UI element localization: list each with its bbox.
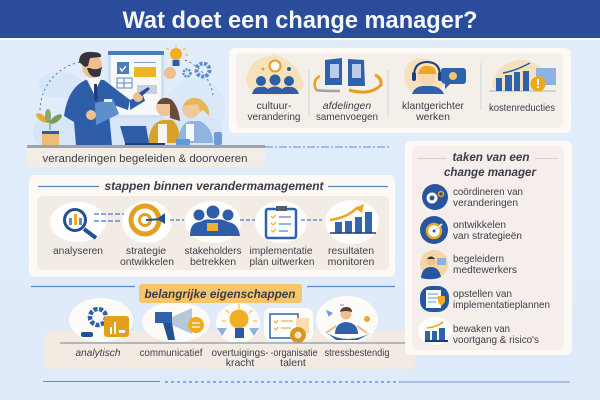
step 1: analyseren: analyseren [53, 245, 103, 257]
label: cultuurverandering: verandering [248, 111, 301, 123]
icon: plant [35, 109, 63, 146]
caption: veranderingen begeleiden [27, 145, 265, 167]
label: afdelingen samenvoegen [316, 100, 378, 123]
heading [444, 152, 537, 179]
heading: belangrijke eigenschappen: belangrijke eigenschappen [144, 287, 296, 301]
step 2: strategie ontwikkelen [120, 201, 174, 268]
heading: stappen: stappen binnen verandermamagement [104, 181, 325, 193]
icon: light bulb [164, 45, 188, 79]
title: Wat doet een change manager? [122, 7, 478, 34]
task: bewaken: bewaken van [453, 323, 510, 335]
manager figure [64, 52, 150, 145]
label: klantgerichter werken: klantgerichter [402, 100, 464, 112]
step 3: stakeholders betrekken: betrekken [190, 256, 236, 268]
task: bewaken: voortgang & risico's [453, 334, 539, 346]
trait: communicatief [140, 302, 210, 359]
hero illustration [33, 45, 225, 146]
task: coördineren: coördineren van [453, 186, 523, 198]
task: begeleiden: medtewerkers [453, 264, 517, 276]
task: opstellen: opstellen van [453, 288, 512, 300]
title [0, 0, 600, 40]
trait: analytisch: analytisch [76, 347, 121, 359]
caption: veranderingen begeleiden: veranderingen begeleiden & doorvoeren [42, 153, 247, 165]
label: kostenreducties: kostenreducties [489, 102, 555, 114]
trait: organisatietalent: -organisatie [270, 347, 318, 359]
trait: communicatief: communicatief [140, 347, 203, 359]
step 3: stakeholders betrekken [184, 201, 242, 268]
panel: steps [29, 175, 395, 277]
arrow [240, 219, 255, 221]
task: coördineren [422, 184, 523, 210]
section: eigenschappen [31, 284, 415, 369]
arrow [170, 219, 184, 221]
icon: cost reductions [489, 60, 556, 92]
task: coördineren: veranderingen [453, 197, 518, 209]
trait: overtuigingskracht: overtuigings- [212, 347, 269, 359]
label: klantgerichter werken: werken [415, 111, 450, 123]
task: ontwikkelen [420, 216, 522, 244]
seated colleagues [120, 98, 222, 145]
icon: gears [184, 64, 210, 76]
icon: merging departments [315, 58, 381, 92]
trait: organisatietalent: talent [280, 357, 306, 369]
step 4: implementatie plan [250, 201, 315, 268]
step 5: resultaten monitoren [325, 200, 379, 268]
step 1: analyseren [50, 202, 106, 257]
heading: belangrijke eigenschappen [139, 284, 302, 303]
task: bewaken [418, 317, 539, 346]
step 5: resultaten monitoren: monitoren [328, 256, 374, 268]
arrow [301, 219, 322, 221]
task: ontwikkelen: ontwikkelen [453, 219, 506, 231]
label: cultuurverandering [248, 100, 301, 123]
trait: overtuigingskracht: kracht [226, 357, 254, 369]
step 4: implementatie plan: plan uitwerken [250, 256, 315, 268]
task: begeleiden: begeleidern [453, 253, 504, 265]
task: opstellen [420, 286, 550, 312]
trait: analytisch [69, 298, 133, 359]
trait: organisatietalent [264, 308, 318, 369]
step 5: resultaten monitoren: resultaten [328, 245, 374, 257]
step 3: stakeholders betrekken: stakeholders [184, 245, 242, 257]
heading: change manager [444, 167, 537, 179]
label: klantgerichter werken [402, 100, 464, 123]
arrow [94, 214, 124, 221]
icon: customer service [404, 58, 466, 94]
task: begeleiden [420, 250, 517, 279]
step 2: strategie ontwikkelen: strategie [126, 245, 166, 257]
trait: overtuigingskracht [212, 303, 269, 369]
trait: stressbestendig [316, 296, 390, 359]
step 4: implementatie plan: implementatie [250, 245, 313, 257]
icon: culture change [246, 55, 304, 95]
label: cultuurverandering: cultuur- [256, 100, 292, 112]
heading: taken van een [452, 152, 530, 164]
label: afdelingen samenvoegen: samenvoegen [316, 111, 378, 123]
task: opstellen: implementatieplannen [453, 299, 550, 311]
band [44, 331, 415, 369]
panel: change topics [229, 48, 571, 133]
presentation board [108, 51, 164, 118]
label: afdelingen samenvoegen: afdelingen [323, 100, 371, 112]
task: ontwikkelen: van strategieën [453, 230, 522, 242]
panel: taken van een change manager [405, 141, 572, 355]
trait: stressbestendig: stressbestendig [324, 347, 390, 359]
step 2: strategie ontwikkelen: ontwikkelen [120, 256, 174, 268]
